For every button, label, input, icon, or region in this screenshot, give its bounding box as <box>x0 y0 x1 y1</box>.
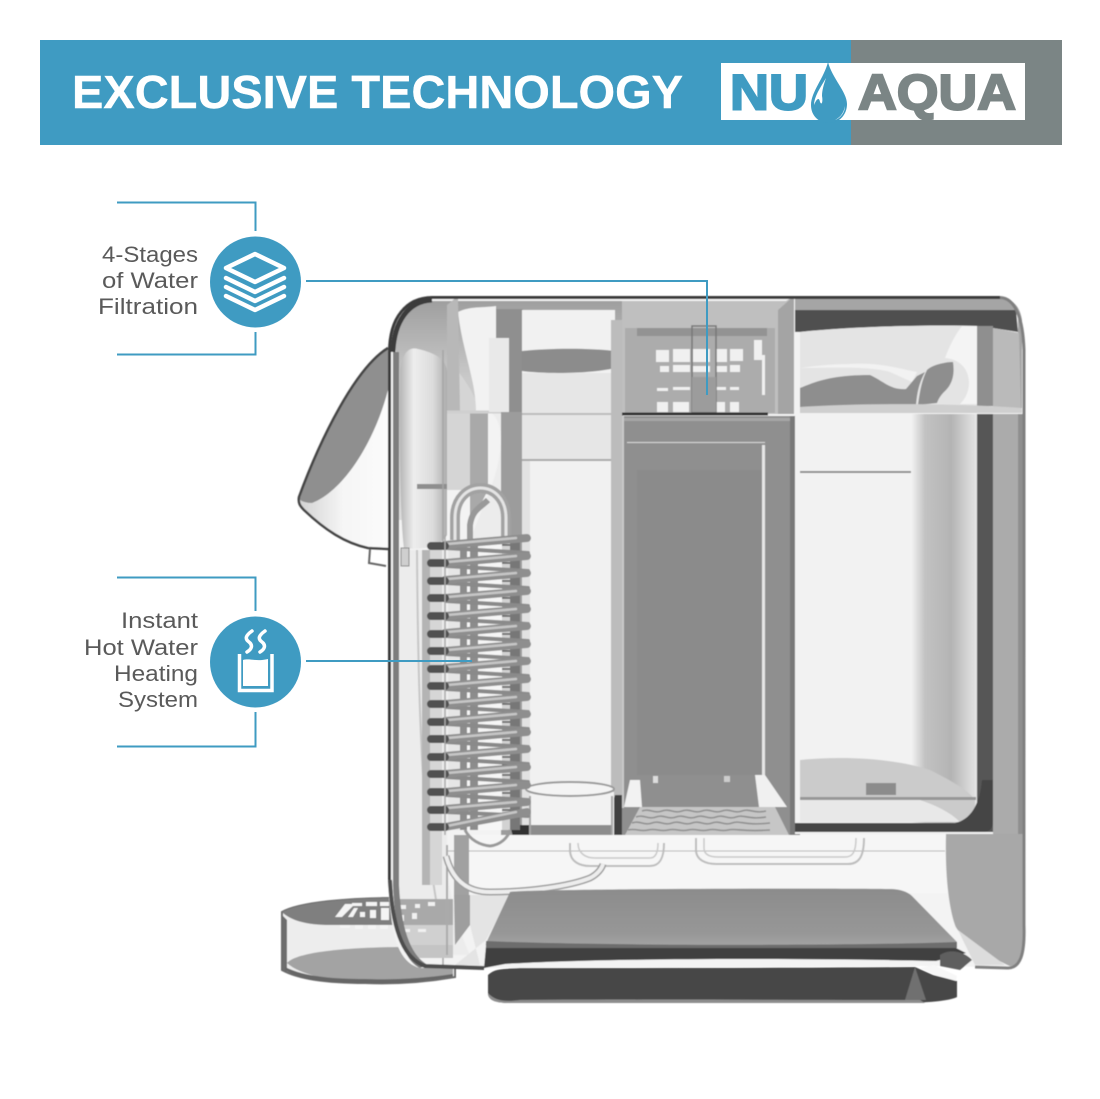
label text: Hot Water <box>84 635 198 660</box>
connector to coil <box>306 660 472 662</box>
body shell <box>388 296 1026 969</box>
icon: stacked filter layers <box>210 236 301 328</box>
logo: Nu Aqua: NU <box>730 64 808 120</box>
title: EXCLUSIVE TECHNOLOGY <box>72 66 683 118</box>
label text <box>84 608 198 712</box>
right base wall <box>946 834 1025 966</box>
corrugated base <box>625 807 789 835</box>
bottom pipe <box>446 856 603 892</box>
logo: Nu Aqua <box>721 62 1025 123</box>
label text: Heating <box>114 661 198 686</box>
coil: inner risers <box>448 540 520 830</box>
callout: Instant Hot Water Heating System <box>84 578 472 746</box>
filter basket <box>622 296 794 414</box>
coil: upper hairpin <box>455 488 506 540</box>
label text: Filtration <box>98 294 198 319</box>
header banner <box>40 40 1062 145</box>
icon: steaming hot water cup <box>210 616 301 708</box>
product cutaway illustration <box>282 296 1026 1003</box>
label text: 4-Stages <box>102 242 198 267</box>
label text: of Water <box>102 268 198 293</box>
lower cavity <box>447 835 950 965</box>
bracket lines <box>117 578 256 746</box>
water tank <box>795 296 1024 844</box>
upper shell band <box>396 301 622 520</box>
label text <box>98 242 198 319</box>
cup at base of filter <box>510 782 624 845</box>
heating coil <box>431 488 528 846</box>
bracket lines <box>117 202 256 354</box>
filter cylinder <box>489 309 623 837</box>
left side panel <box>397 348 487 965</box>
callout: 4-Stages of Water Filtration <box>98 202 707 395</box>
dispenser spout <box>299 348 409 566</box>
base tray <box>484 889 972 1003</box>
drip tray <box>282 898 455 983</box>
tray seen through shell <box>397 899 453 958</box>
outer shell edges <box>390 298 1024 968</box>
filter cartridge <box>622 416 800 835</box>
logo: Nu Aqua: AQUA <box>858 64 1016 120</box>
connector to filter <box>306 281 707 395</box>
S-curve white chamber <box>458 306 496 412</box>
label text: System <box>118 687 198 712</box>
coil: turns <box>431 538 528 827</box>
label text: Instant <box>121 608 198 633</box>
